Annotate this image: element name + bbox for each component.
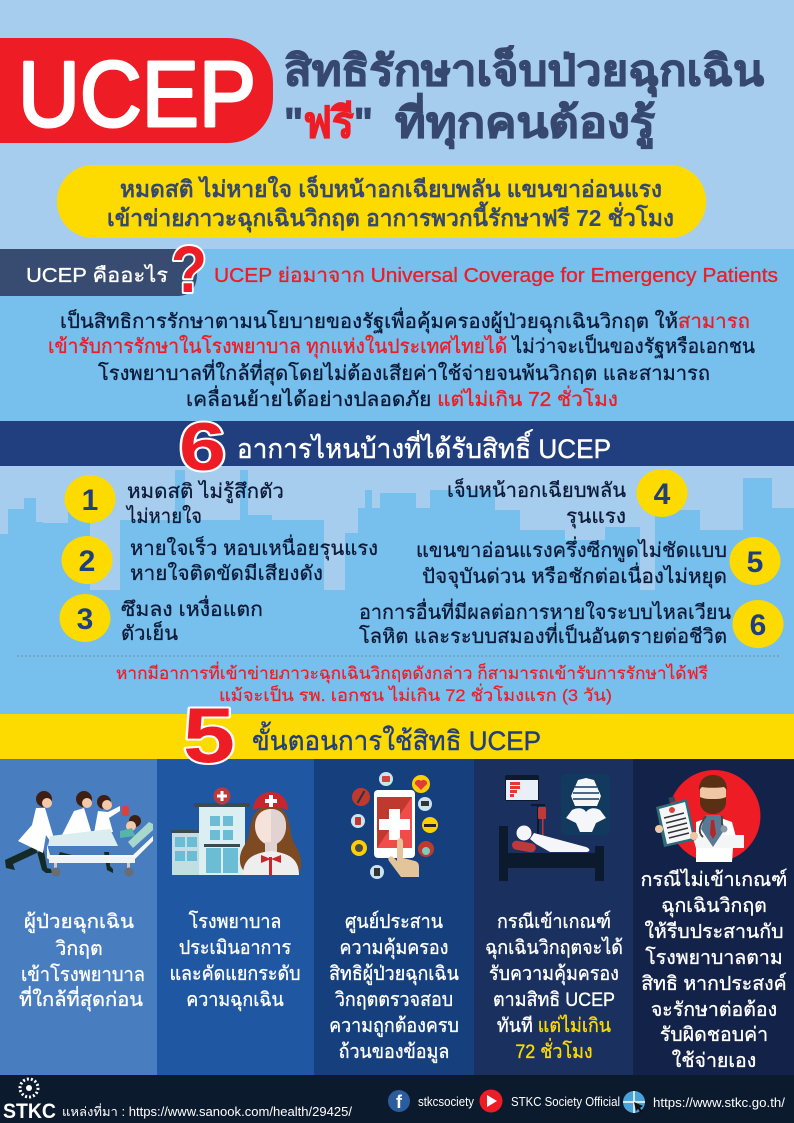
band: 5 steps heading: ขั้นตอนการใช้สิทธิ UCEP [252, 721, 541, 756]
step 4 text: รับความคุ้มครอง [489, 962, 619, 986]
band: 6 symptoms heading: 6 [179, 409, 226, 485]
symptom 1 [64, 475, 284, 528]
panel: step 1: เข้าโรงพยาบาล [21, 963, 145, 986]
symptom 4: รุนแรง [566, 506, 626, 529]
panel: step 5: ฉุกเฉินวิกฤต [661, 895, 767, 918]
explanation paragraph: เข้ารับการรักษาในโรงพยาบาล ทุกแห่งในประเทศไทยได้ ไม่ว่าจะเป็นของรัฐหรือเอกชน [48, 333, 755, 359]
logo: STKC [3, 1079, 56, 1123]
red note: หากมีอาการที่เข้าข่ายภาวะฉุกเฉินวิกฤตดังกล่าว ก็สามารถเข้ารับการรักษาได้ฟรี [116, 661, 708, 684]
panel: step 2 [157, 759, 314, 1075]
step 3 text: ถ้วนของข้อมูล [339, 1040, 449, 1063]
step 3 text [329, 910, 459, 1063]
explanation paragraph: เป็นสิทธิการรักษาตามนโยบายของรัฐเพื่อคุ้มครองผู้ป่วยฉุกเฉินวิกฤต ให้ สามารถ [60, 307, 750, 334]
explanation paragraph: โรงพยาบาลที่ใกล้ที่สุดโดยไม่ต้องเสียค่าใช้จ่ายจนพ้นวิกฤต และสามารถ [98, 359, 710, 386]
symptom 6: อาการอื่นที่มีผลต่อการหายใจระบบไหลเวียน [359, 598, 731, 624]
step 4 text: ทันที แต่ไม่เกิน [497, 1014, 611, 1036]
step 2 text: ความฉุกเฉิน [186, 988, 284, 1012]
symptom 1: หมดสติ ไม่รู้สึกตัว [127, 480, 284, 504]
symptom 3: ซึมลง เหงื่อแตก [121, 595, 263, 621]
illustration: stretcher team [5, 791, 153, 876]
symptom 5: ปัจจุบันด่วน หรือชักต่อเนื่องไม่หยุด [422, 562, 727, 589]
youtube name: STKC Society Official [511, 1095, 620, 1109]
step 2 text: ประเมินอาการ [179, 936, 291, 958]
title: UCEP red badge: UCEP [18, 42, 256, 146]
panel: what is UCEP [0, 232, 794, 421]
illustration: patient in bed and x-ray [499, 774, 610, 881]
panel: step 3 [314, 759, 474, 1075]
panel: step 5: สิทธิ หากประสงค์ [641, 972, 787, 995]
step 2 text [170, 910, 300, 1012]
subtitle yellow pill [57, 165, 706, 238]
step 4 text: ฉุกเฉินวิกฤตจะได้ [485, 936, 623, 960]
skyline background [0, 466, 794, 716]
red note [116, 661, 708, 705]
symptom 5: แขนขาอ่อนแรงครึ่งซีกพูดไม่ชัดแบบ [416, 536, 727, 563]
step 2 text: และคัดแยกระดับ [170, 962, 300, 984]
symptom 4 [447, 469, 688, 529]
symptom 2: หายใจติดขัดมีเสียงดัง [130, 562, 323, 585]
panel: step 1: วิกฤต [55, 938, 103, 960]
symptom 2 [62, 534, 378, 585]
step 4 text: ตามสิทธิ UCEP [493, 988, 615, 1010]
symptom 1: ไม่หายใจ [125, 505, 202, 528]
title: heading lines: ที่ทุกคนต้องรู้ [395, 93, 655, 149]
symptom 6 [359, 598, 784, 648]
illustration: doctor with clipboard [655, 770, 760, 862]
panel: step 1: ที่ใกล้ที่สุดก่อน [19, 986, 143, 1012]
subtitle yellow pill: หมดสติ ไม่หายใจ เจ็บหน้าอกเฉียบพลัน แขนขาอ่อนแรง [120, 174, 662, 202]
panel: step 5: รับผิดชอบค่า [660, 1024, 768, 1046]
symptom 6: 6 [750, 609, 766, 642]
website: https://www.stkc.go.th/ [653, 1096, 786, 1110]
panel: step 4 [474, 759, 633, 1075]
UCEP label tab [0, 249, 197, 296]
step 3 text: ความคุ้มครอง [340, 936, 448, 960]
logo: STKC: STKC [3, 1100, 56, 1123]
panel: step 5 [633, 759, 794, 1075]
panel: step 1: ผู้ป่วยฉุกเฉิน [24, 911, 134, 934]
symptom 6: โลหิต และระบบสมองที่เป็นอันตรายต่อชีวิต [359, 622, 727, 648]
symptom 5 [416, 536, 780, 589]
illustration: hospital and nurse [171, 788, 301, 875]
explanation paragraph: เคลื่อนย้ายได้อย่างปลอดภัย แต่ไม่เกิน 72 ชั่วโมง [186, 385, 618, 411]
panel: step 5: จะรักษาต่อต้อง [651, 999, 777, 1021]
UCEP label tab: UCEP คืออะไร [26, 264, 168, 287]
symptom 4: 4 [654, 478, 671, 511]
step 2 text: โรงพยาบาล [189, 910, 281, 932]
panel: step 5: ใช้จ่ายเอง [672, 1049, 756, 1072]
step 3 text: ศูนย์ประสาน [345, 910, 443, 933]
footer [0, 1075, 794, 1123]
icon: facebook: f [396, 1092, 403, 1112]
step 4 text: กรณีเข้าเกณฑ์ [497, 910, 611, 932]
symptom 2: 2 [79, 545, 95, 578]
panel: step 1 [0, 759, 157, 1075]
title: heading lines: สิทธิรักษาเจ็บป่วยฉุกเฉิน [284, 45, 764, 97]
step 3 text: วิกฤตตรวจสอบ [334, 988, 453, 1010]
band: 6 symptoms heading: อาการไหนบ้างที่ได้รับสิทธิ์ UCEP [237, 429, 611, 464]
symptom 3: ตัวเย็น [121, 620, 178, 645]
symptom 3: 3 [77, 603, 93, 636]
panel: step 5: โรงพยาบาลตาม [645, 946, 783, 969]
symptom 2: หายใจเร็ว หอบเหนื่อยรุนแรง [130, 534, 378, 561]
panel: step 5: กรณีไม่เข้าเกณฑ์ [641, 868, 787, 891]
step 3 text: สิทธิผู้ป่วยฉุกเฉิน [329, 962, 459, 986]
symptom 4: เจ็บหน้าอกเฉียบพลัน [447, 477, 626, 502]
step 3 text: ความถูกต้องครบ [329, 1014, 459, 1037]
icon: globe [623, 1091, 645, 1113]
symptom 3 [60, 594, 263, 645]
symptom 5: 5 [747, 546, 763, 579]
band: 6 symptoms heading [0, 409, 794, 485]
facebook name: stkcsociety [418, 1095, 475, 1109]
icon: question mark: ? [171, 232, 207, 306]
subtitle yellow pill: เข้าข่ายภาวะฉุกเฉินวิกฤต อาการพวกนี้รักษาฟรี 72 ชั่วโมง [107, 201, 674, 233]
icon: youtube [480, 1090, 502, 1112]
number 5 badge: 5 [183, 691, 235, 779]
explanation paragraph [48, 307, 755, 411]
title: heading lines: "ฟรี" [284, 99, 373, 146]
red note: แม้จะเป็น รพ. เอกชน ไม่เกิน 72 ชั่วโมงแรก (3 วัน) [219, 683, 612, 705]
UCEP definition: UCEP ย่อมาจาก Universal Coverage for Emergency Patients [214, 265, 778, 287]
step 4 text [485, 910, 623, 1062]
illustration: phone with medical icons [351, 772, 438, 879]
step 4 text: 72 ชั่วโมง [515, 1038, 593, 1062]
icon: facebook [388, 1090, 410, 1112]
source: แหล่งที่มา : https://www.sanook.com/health/29425/ [62, 1103, 353, 1119]
panel: step 5: ให้รีบประสานกับ [645, 920, 783, 943]
symptom 1: 1 [82, 484, 98, 517]
band: 5 steps heading [0, 714, 794, 759]
title: heading lines [284, 45, 764, 149]
